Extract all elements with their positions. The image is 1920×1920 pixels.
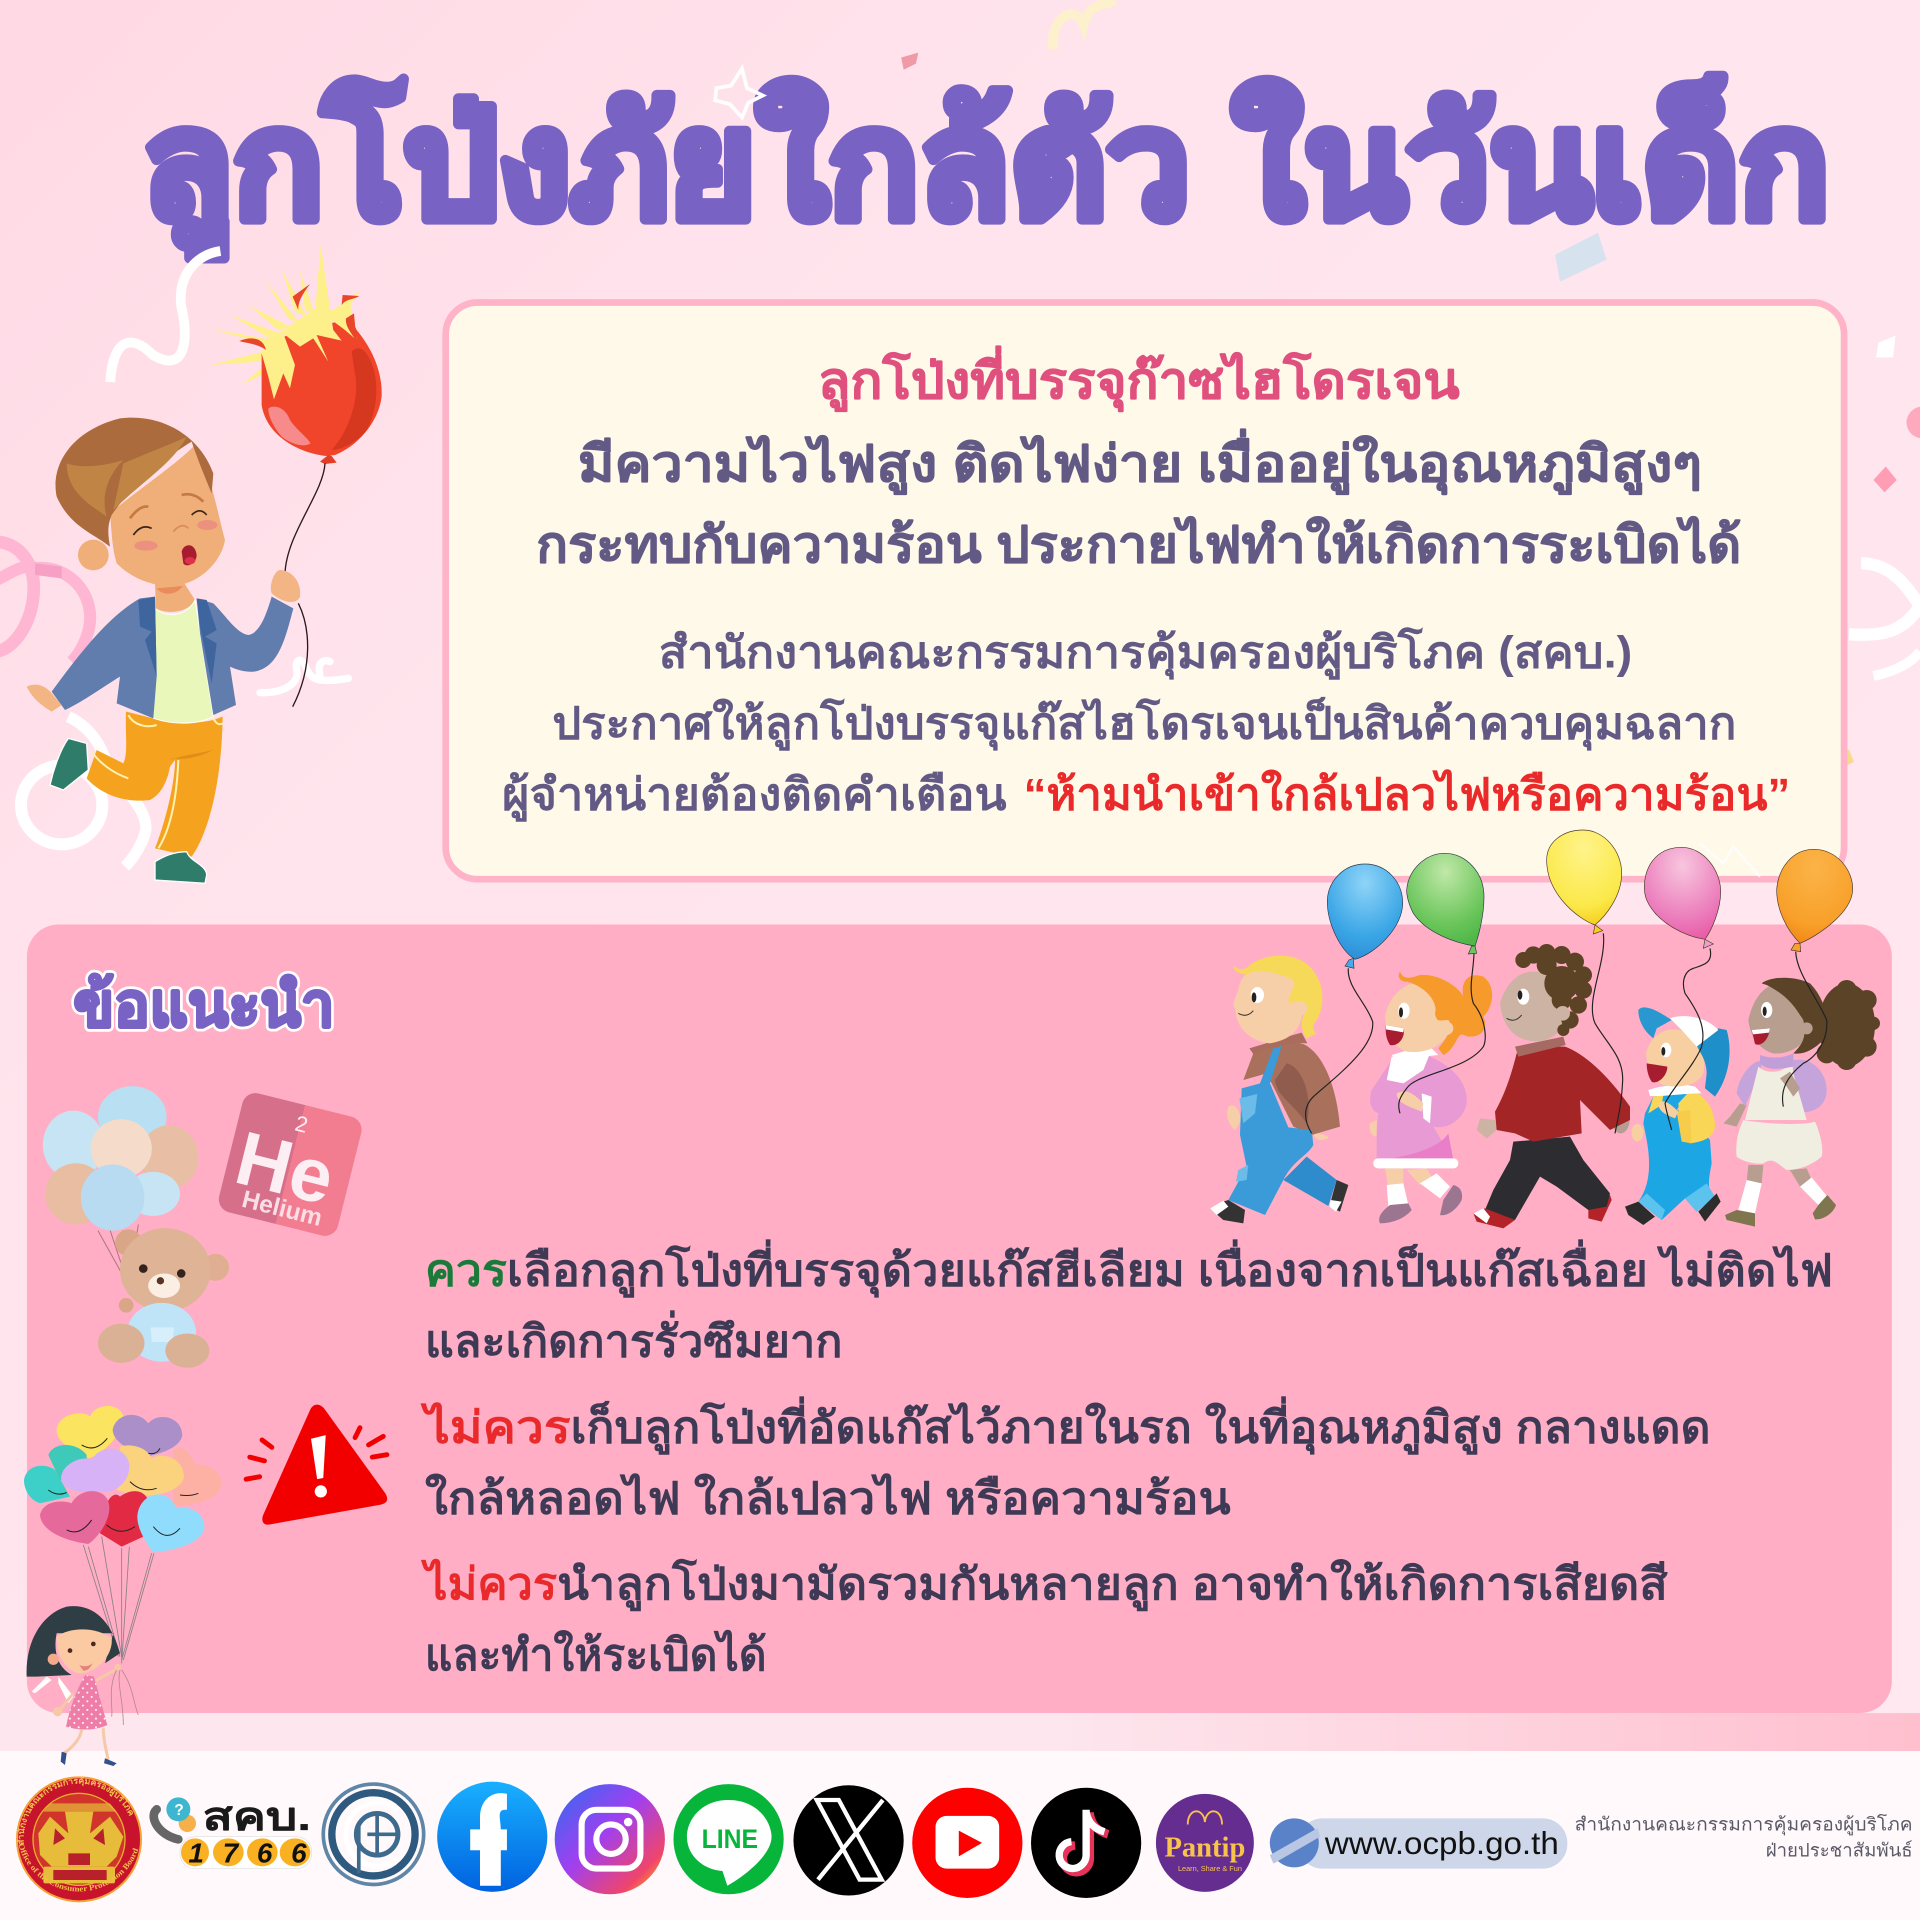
icon: OCPB seal <box>16 1776 142 1902</box>
icon: YouTube <box>912 1788 1022 1898</box>
trousers <box>87 712 223 857</box>
icon: Instagram <box>555 1784 665 1894</box>
title: ลูกโป่งภัยใกล้ตัว ในวันเด็ก <box>142 76 1829 259</box>
icon: helium element tile: 2 <box>293 1111 310 1138</box>
footer credit <box>1575 1814 1913 1860</box>
icon: X <box>793 1785 904 1896</box>
shoes <box>50 738 88 790</box>
logo: OCPB hotline 1766: สคบ. <box>203 1795 311 1839</box>
advice: do not store in heat line 1: เก็บลูกโป่งที่อัดแก๊สไว้ภายในรถ ในที่อุณหภูมิสูง กลางแดด <box>571 1396 1711 1455</box>
flames <box>262 300 357 399</box>
illustration: girl with heart balloons <box>24 1406 222 1766</box>
head <box>56 418 225 586</box>
icon: helium element tile <box>216 1090 364 1239</box>
child: girl in pink dress <box>1370 972 1492 1223</box>
logo: OCPB hotline 1766: 1766 <box>188 1838 307 1869</box>
text: regulator line 2: ประกาศให้ลูกโป่งบรรจุแก๊สไฮโดรเจนเป็นสินค้าควบคุมฉลาก <box>552 696 1736 751</box>
website link: www.ocpb.go.th <box>1324 1825 1559 1861</box>
heading: advice: ข้อแนะนำ <box>73 971 334 1039</box>
balloon body <box>262 321 382 456</box>
advice: choose helium line 1: เลือกลูกโป่งที่บรรจุด้วยแก๊สฮีเลียม เนื่องจากเป็นแก๊สเฉื่อย ไม่ติดไฟ <box>507 1240 1833 1299</box>
advice: choose helium line 2: และเกิดการรั่วซึมยาก <box>425 1311 842 1367</box>
logo: Pantip: Learn, Share & Fun <box>1178 1864 1242 1873</box>
icon: helium element tile: Helium <box>239 1186 325 1232</box>
blue and green balloons <box>1306 853 1485 1133</box>
text: regulator line 3: ผู้จำหน่ายต้องติดคำเตือน <box>502 770 1007 821</box>
heading: advice: ข้อแนะนำ <box>73 971 334 1039</box>
decorative ribbon and star over title <box>110 69 763 382</box>
advice text <box>420 1240 1833 1680</box>
balloon string <box>285 463 325 707</box>
advice: do not store in heat line 1: ไม่ควร <box>420 1401 571 1452</box>
illustration: bear with pastel balloons <box>43 1086 229 1368</box>
advice: do not store in heat line 2: ใกล้หลอดไฟ ใกล้เปลวไฟ หรือความร้อน <box>425 1472 1231 1523</box>
heart balloons <box>24 1406 222 1553</box>
background confetti and ribbons <box>0 0 1920 867</box>
panel: advice <box>27 924 1892 1713</box>
illustration: children walking with balloons, right two <box>1547 830 1880 1227</box>
icon: helium element tile: He <box>228 1115 342 1221</box>
girl <box>27 1606 121 1766</box>
text: regulator line 1: สำนักงานคณะกรรมการคุ้มครองผู้บริโภค (สคบ.) <box>659 625 1632 680</box>
logo: CPE circle <box>323 1784 424 1884</box>
strings <box>98 1224 138 1286</box>
white squiggle <box>1700 843 1760 877</box>
advice: do not store in heat line 1 <box>420 1396 1711 1455</box>
panel: hydrogen balloon warning <box>446 302 1844 879</box>
advice: do not tie together line 1: ไม่ควร <box>421 1558 557 1609</box>
advice: choose helium line 1: ควร <box>425 1247 507 1296</box>
icon: TikTok <box>1031 1788 1141 1898</box>
pastel balloons <box>43 1086 198 1231</box>
hands <box>27 685 62 712</box>
text: flammability line 2: กระทบกับความร้อน ประกายไฟทำให้เกิดการระเบิดได้ <box>536 515 1741 573</box>
logo: OCPB hotline 1766 <box>154 1795 312 1869</box>
illustration: boy holding balloon string <box>27 418 325 883</box>
illustration: burning red balloon <box>208 245 382 464</box>
icon: LINE <box>673 1784 784 1894</box>
decorative band under panel <box>0 1713 1920 1751</box>
jacket <box>52 597 157 718</box>
subheading: hydrogen balloons: ลูกโป่งที่บรรจุก๊าซไฮโดรเจน <box>818 345 1460 412</box>
footer credit: สำนักงานคณะกรรมการคุ้มครองผู้บริโภค <box>1575 1814 1913 1837</box>
child: girl with hair puff <box>1723 978 1880 1227</box>
advice: do not tie together line 1: นำลูกโป่งมามัดรวมกันหลายลูก อาจทำให้เกิดการเสียดสี <box>557 1557 1668 1611</box>
yellow, pink and orange balloons <box>1547 830 1853 1133</box>
footer bar <box>0 1751 1920 1920</box>
icon: OCPB seal: สำนักงานคณะกรรมการคุ้มครองผู้บริโภค <box>16 1776 133 1845</box>
yellow rays <box>208 245 360 385</box>
logo: Pantip: Pantip <box>1164 1832 1245 1863</box>
pink and white ribbons behind the boy <box>0 542 348 867</box>
illustration: children walking with balloons, left three <box>1210 853 1630 1228</box>
advice: do not tie together line 2: และทำให้ระเบิดได้ <box>425 1629 767 1680</box>
shirt <box>153 600 213 723</box>
bear <box>98 1228 229 1368</box>
text: red warning quote: “ห้ามนำเข้าใกล้เปลวไฟหรือความร้อน” <box>1024 768 1790 819</box>
strings <box>83 1537 154 1663</box>
child: small boy with cap <box>1625 1007 1730 1225</box>
logo: OCPB hotline 1766: ? <box>174 1802 184 1819</box>
child: blond boy <box>1210 956 1348 1223</box>
icon: LINE: LINE <box>702 1824 758 1854</box>
icon: warning triangle <box>246 1405 387 1525</box>
icon: OCPB seal: Office of the Consumer Protection Board <box>19 1844 138 1892</box>
child: boy with red sweater <box>1473 944 1630 1228</box>
icon: Facebook <box>437 1782 547 1892</box>
logo: Pantip <box>1156 1794 1254 1892</box>
text: flammability line 1: มีความไวไฟสูง ติดไฟง่าย เมื่ออยู่ในอุณหภูมิสูงๆ <box>578 428 1702 495</box>
neck <box>155 582 195 612</box>
website link <box>1270 1818 1567 1869</box>
footer credit: ฝ่ายประชาสัมพันธ์ <box>1766 1839 1913 1860</box>
